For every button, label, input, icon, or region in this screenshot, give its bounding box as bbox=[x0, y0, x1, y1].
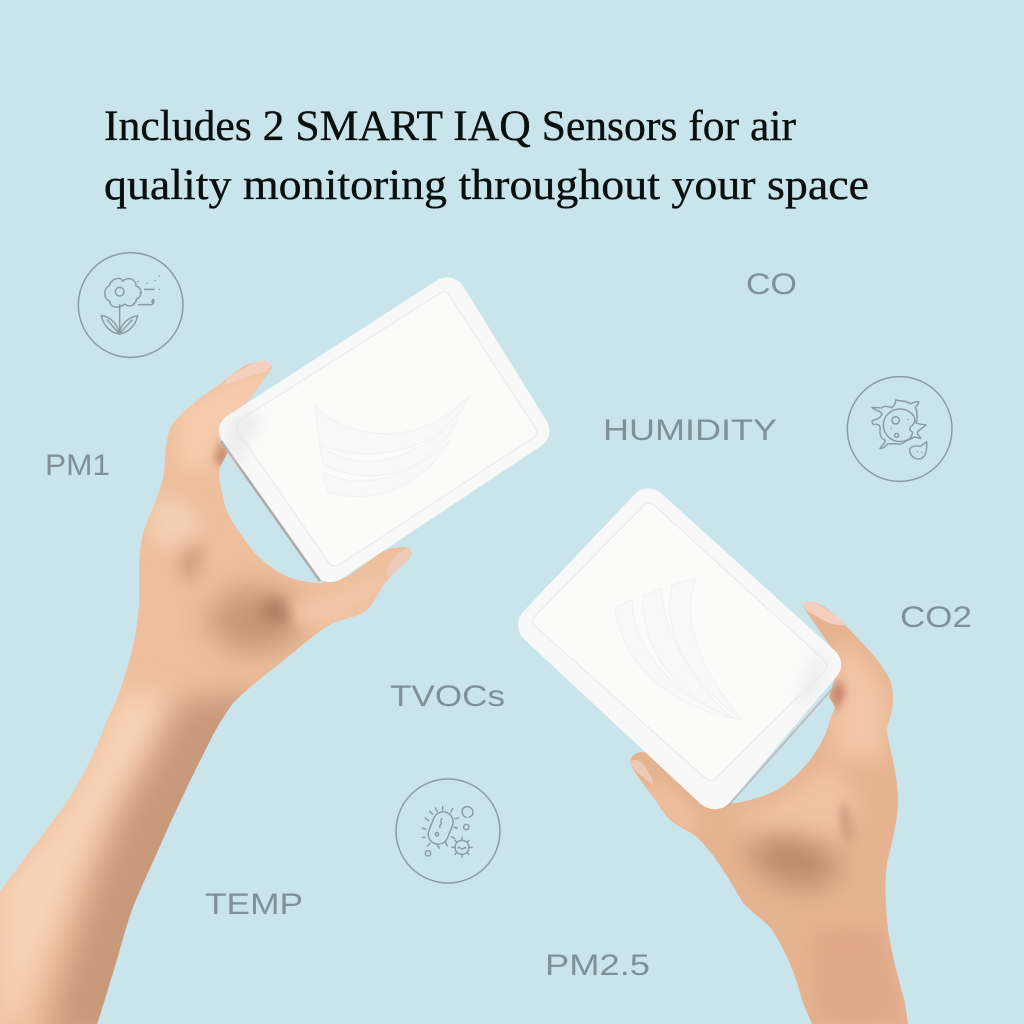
left index fingernail bbox=[386, 549, 411, 576]
right hand and arm bbox=[620, 590, 920, 1024]
thumb shadow on sensor bbox=[226, 408, 262, 470]
label: CO2: CO2 bbox=[900, 601, 972, 634]
right sensor bbox=[528, 498, 840, 806]
icon: flower with pollen bbox=[78, 253, 183, 357]
sensor face bbox=[533, 503, 827, 780]
embossed wave logo bbox=[615, 578, 742, 720]
title: quality monitoring throughout your space bbox=[104, 162, 869, 209]
sensor side edge bbox=[728, 680, 840, 806]
embossed wave logo bbox=[315, 395, 470, 496]
icon: bacteria bbox=[396, 779, 500, 883]
sensor body bbox=[528, 498, 831, 799]
left sensor bbox=[221, 288, 539, 581]
label: TVOCs: TVOCs bbox=[390, 680, 505, 713]
label: PM2.5: PM2.5 bbox=[545, 949, 650, 982]
thumb shadow on sensor bbox=[795, 650, 828, 712]
right index fingernail bbox=[630, 760, 653, 784]
title bbox=[104, 103, 869, 209]
icon: mold spore bbox=[847, 377, 952, 481]
right thumbnail bbox=[803, 601, 846, 625]
left thumbnail bbox=[226, 360, 270, 384]
label: HUMIDITY: HUMIDITY bbox=[603, 414, 777, 447]
label: CO: CO bbox=[746, 268, 797, 301]
label: PM1: PM1 bbox=[45, 449, 110, 482]
sensor face bbox=[237, 292, 537, 566]
sensor side edge bbox=[221, 441, 320, 581]
sensor body bbox=[229, 288, 539, 572]
title: Includes 2 SMART IAQ Sensors for air bbox=[104, 103, 796, 150]
left hand and arm bbox=[0, 350, 430, 1024]
label: TEMP: TEMP bbox=[205, 888, 303, 921]
